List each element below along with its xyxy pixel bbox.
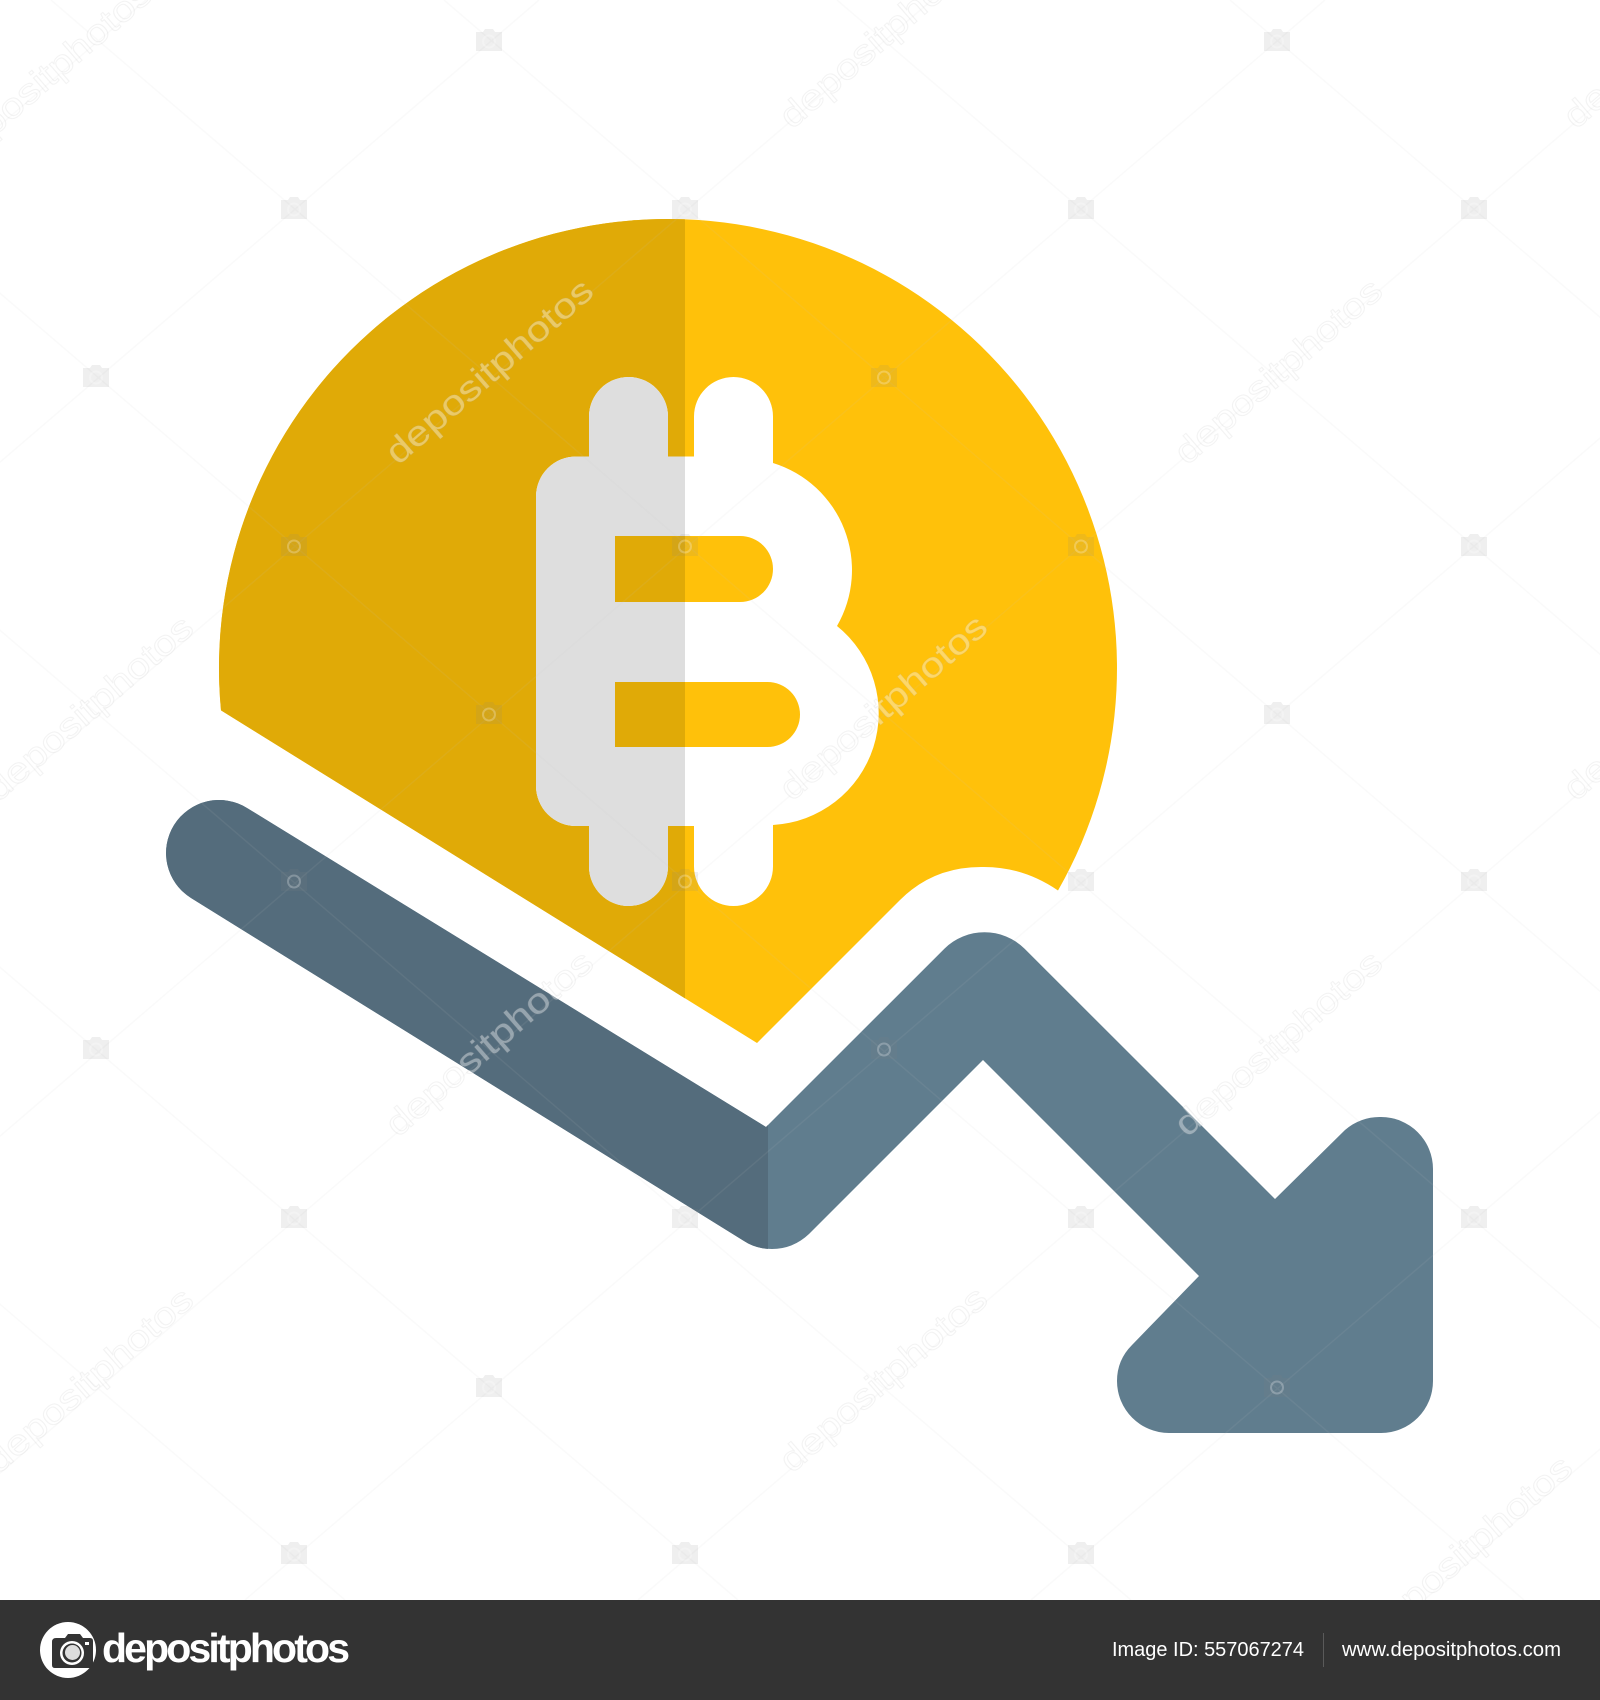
watermark: diagonal lattice, text and camera marks: depositphotos [1167, 943, 1390, 1144]
watermark: diagonal lattice, text and camera marks: depositphotos [1167, 271, 1390, 472]
website url: www.depositphotos.com [1341, 1639, 1561, 1661]
footer bar [0, 1600, 1600, 1700]
image id: Image ID: 557067274 [1112, 1639, 1304, 1661]
icon: bitcoin symbol [536, 377, 879, 906]
watermark: diagonal lattice, text and camera marks: depositphotos [772, 607, 995, 808]
watermark: diagonal lattice, text and camera marks: depositphotos [378, 271, 601, 472]
icon: bitcoin coin [219, 219, 1117, 1043]
watermark: diagonal lattice, text and camera marks: depositphotos [1357, 1448, 1580, 1649]
logo wordmark: depositphotos [102, 1625, 350, 1671]
watermark: diagonal lattice, text and camera marks: depositphotos [378, 943, 601, 1144]
watermark: diagonal lattice, text and camera marks: depositphotos [772, 1279, 995, 1480]
arrow: downward trend line [166, 800, 1433, 1433]
icon: depositphotos camera logo [40, 1622, 96, 1678]
